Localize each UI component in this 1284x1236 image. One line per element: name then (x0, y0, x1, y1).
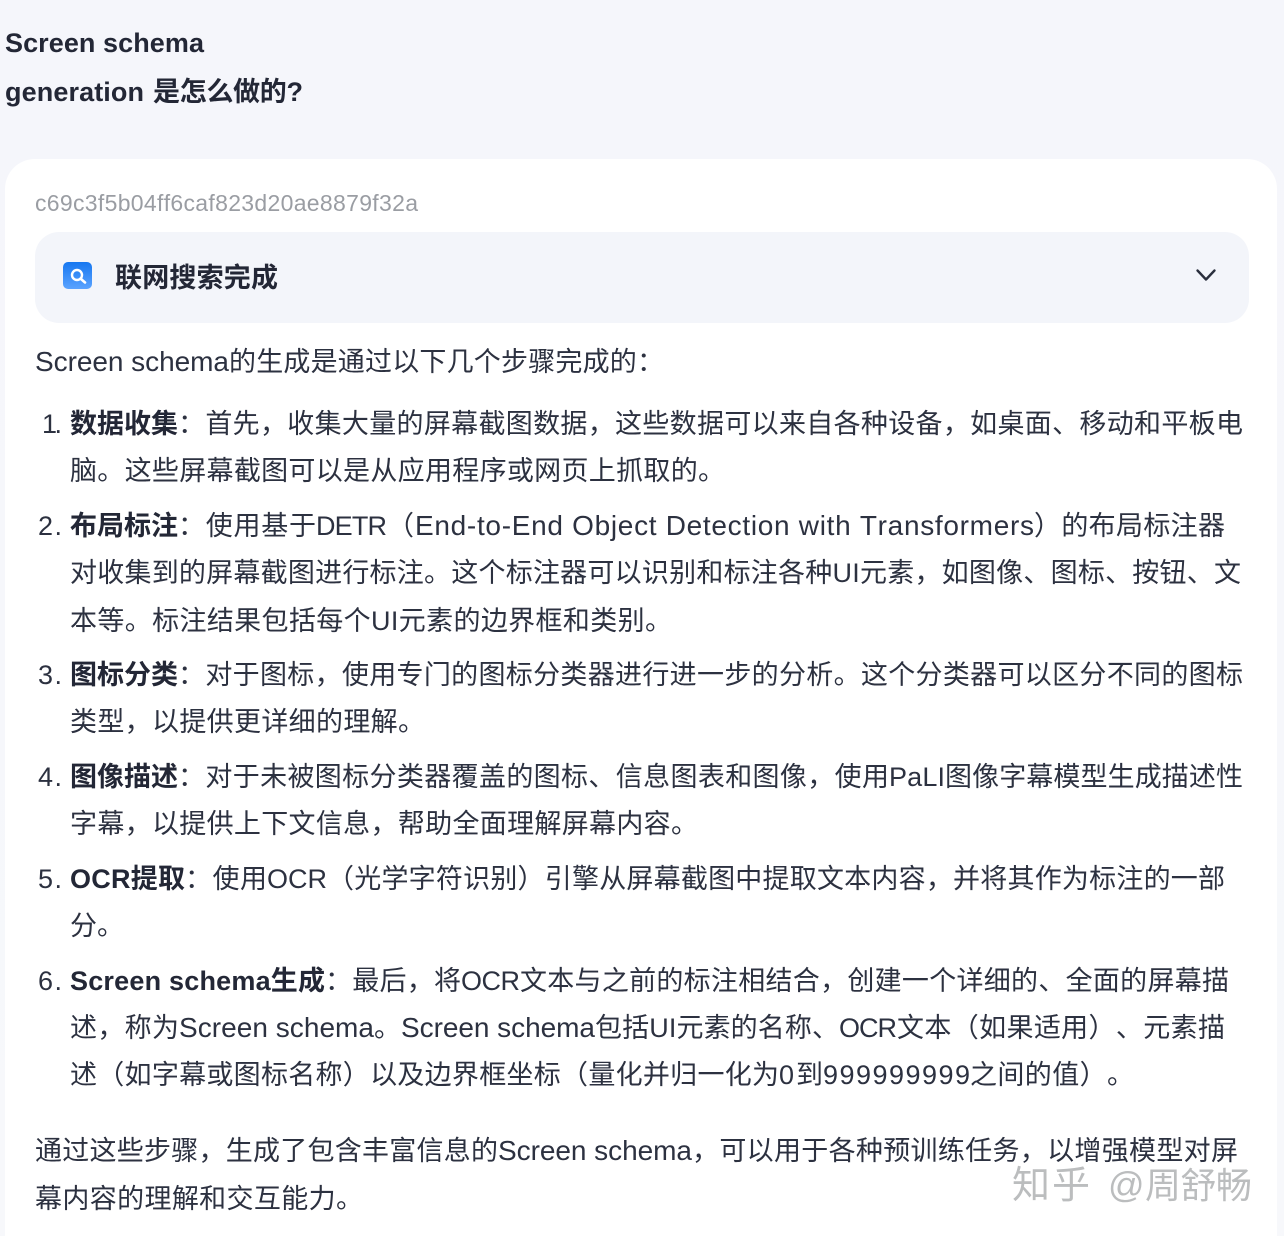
closing paragraph: ，可以用于各种预训练任务，以增强模型对屏 (692, 1136, 1238, 1166)
intro sentence: Screen schema (35, 346, 229, 377)
list item 1: 脑。这些屏幕截图可以是从应用程序或网页上抓取的。 (70, 456, 725, 486)
list item 6: 之间的值）。 (970, 1060, 1134, 1090)
list item 6: 述（如字幕或图标名称）以及边界框坐标（量化并归一化为 (70, 1060, 779, 1090)
list item 6: 。 (374, 1013, 401, 1043)
list item 6: 到 (796, 1060, 823, 1090)
list item 4: PaLI (889, 762, 945, 792)
list item 1 (42, 409, 1243, 486)
list item 2 (38, 510, 1241, 636)
list item 4: 4. (38, 762, 62, 792)
list item 6: 文本与之前的标注相结合，创建一个详细的、全面的屏幕描 (520, 966, 1229, 996)
list item 4: 图像描述 (70, 762, 178, 792)
watermark: 周舒畅 (1145, 1165, 1252, 1206)
list item 5: ：使用 (185, 864, 267, 894)
question heading: generation (5, 77, 144, 107)
list item 2: ）的布局标注器 (1034, 511, 1225, 541)
panel: web search status bar (35, 232, 1249, 323)
list item 4 (38, 762, 1243, 839)
closing paragraph: 通过这些步骤，生成了包含丰富信息的 (35, 1136, 498, 1166)
list item 6: OCR (839, 1013, 897, 1043)
list item 6: Screen schema生成 (70, 966, 325, 996)
list item 3: 类型，以提供更详细的理解。 (70, 707, 425, 737)
list item 6 (38, 966, 1229, 1090)
watermark: @ (1108, 1164, 1145, 1205)
list item 3 (38, 660, 1243, 737)
hash id: c69c3f5b04ff6caf823d20ae8879f32a (35, 190, 418, 216)
list item 2: DETR (316, 511, 387, 541)
list item 6: 包括UI元素的名称、 (595, 1013, 839, 1043)
question heading: 是怎么做的? (153, 77, 303, 107)
list item 6: 0 (779, 1060, 794, 1090)
list item 1: ：首先，收集大量的屏幕截图数据，这些数据可以来自各种设备，如桌面、移动和平板电 (178, 409, 1243, 439)
search status label: 联网搜索完成 (115, 263, 278, 293)
list item 2: End-to-End Object Detection with Transformers (415, 510, 1034, 541)
list item 6: 999999999 (823, 1060, 970, 1090)
list item 4: 字幕，以提供上下文信息，帮助全面理解屏幕内容。 (70, 809, 698, 839)
list item 1: 1. (42, 409, 62, 439)
watermark (1012, 1164, 1252, 1207)
watermark: 知乎 (1012, 1165, 1090, 1207)
list item 5 (38, 864, 1225, 941)
icon: chevron (1198, 270, 1214, 280)
intro sentence (35, 346, 664, 377)
list item 6: Screen schema (179, 1012, 374, 1043)
list item 6: 述，称为 (70, 1013, 179, 1043)
closing paragraph: 幕内容的理解和交互能力。 (35, 1184, 363, 1214)
list item 6: 文本（如果适用）、元素描 (897, 1013, 1225, 1043)
list item 4: ：对于未被图标分类器覆盖的图标、信息图表和图像，使用 (178, 762, 889, 792)
list item 2: 本等。标注结果包括每个UI元素的边界框和类别。 (70, 606, 672, 636)
list item 6: Screen schema (401, 1012, 595, 1043)
list item 5: （光学字符识别）引擎从屏幕截图中提取文本内容，并将其作为标注的一部 (327, 864, 1225, 894)
intro sentence: 的生成是通过以下几个步骤完成的： (229, 347, 664, 377)
list item 2: 2. (38, 511, 62, 541)
list item 1: 数据收集 (70, 409, 178, 439)
list item 6: OCR (461, 966, 520, 996)
list item 3: ：对于图标，使用专门的图标分类器进行进一步的分析。这个分类器可以区分不同的图标 (178, 660, 1243, 690)
list item 2: 对收集到的屏幕截图进行标注。这个标注器可以识别和标注各种UI元素，如图像、图标、按钮、文 (70, 558, 1241, 588)
list item 5: 分。 (70, 911, 124, 941)
list item 3: 3. (38, 660, 62, 690)
closing paragraph: Screen schema (498, 1135, 692, 1166)
list item 2: ：使用基于 (178, 511, 316, 541)
list item 5: OCR (267, 864, 327, 894)
list item 5: OCR提取 (70, 864, 185, 894)
list item 5: 5. (38, 864, 62, 894)
list item 6: 6. (38, 966, 62, 996)
question heading (5, 28, 303, 107)
list item 3: 图标分类 (70, 660, 178, 690)
list item 4: 图像字幕模型生成描述性 (945, 762, 1243, 792)
closing paragraph (35, 1135, 1238, 1214)
list item 6: ：最后，将 (325, 966, 461, 996)
question heading: Screen schema (5, 28, 205, 58)
list item 2: （ (387, 511, 414, 541)
icon: search (63, 262, 92, 289)
list item 2: 布局标注 (70, 511, 178, 541)
